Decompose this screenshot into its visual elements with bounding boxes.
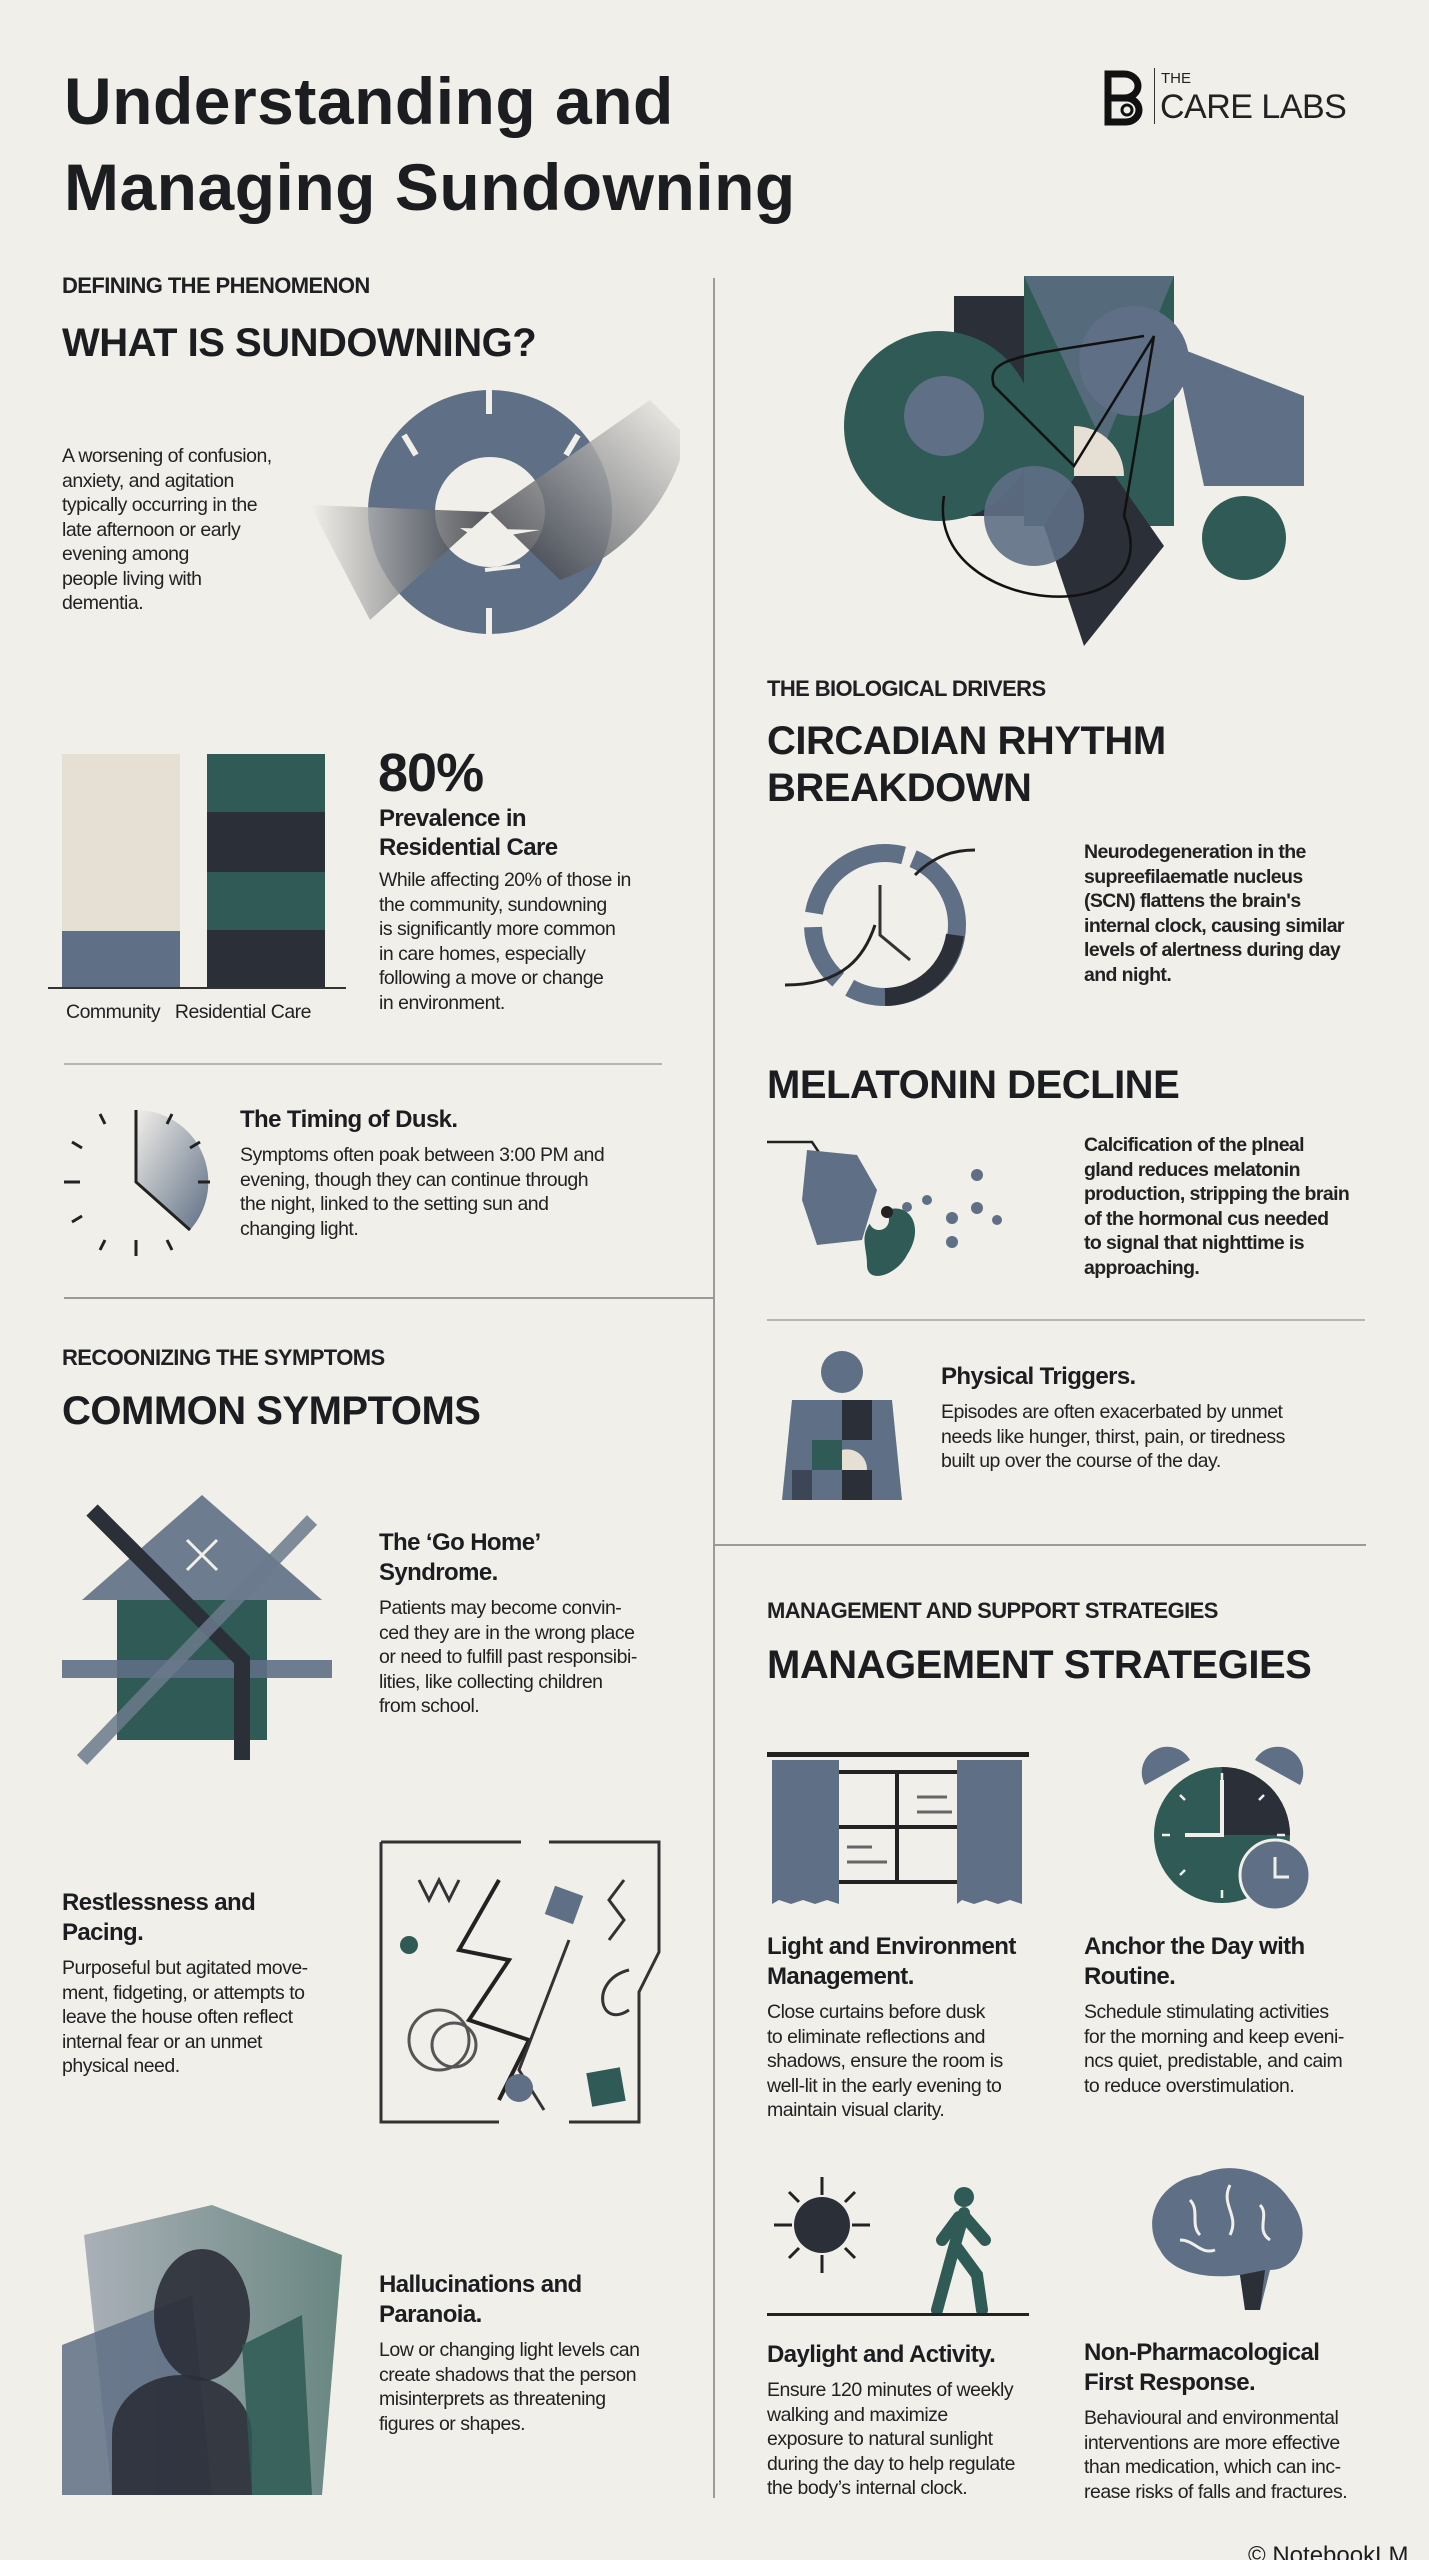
text: go home: or need to fulfill past responsibi- — [379, 1646, 637, 1668]
title: Managing Sundowning — [64, 150, 796, 224]
text: go home: Patients may become convin- — [379, 1597, 621, 1619]
text: daylight: during the day to help regulate — [767, 2452, 1015, 2474]
text: light and environment: shadows, ensure the room is — [767, 2050, 1003, 2072]
text: prevalence: in care homes, especially — [379, 942, 585, 964]
text: anchor the day: Schedule stimulating activities — [1084, 2001, 1329, 2023]
heading: what is sundowning: WHAT IS SUNDOWNING? — [62, 321, 536, 365]
text: non-pharmacological: First Response. — [1084, 2369, 1255, 2396]
text: go home: The ‘Go Home’ — [379, 1529, 541, 1556]
heading: common symptoms: COMMON SYMPTOMS — [62, 1389, 480, 1433]
text: restlessness: Pacing. — [62, 1919, 143, 1946]
text: light and environment — [767, 1933, 1016, 2121]
text: anchor the day: ncs quiet, predistable, and caim — [1084, 2050, 1342, 2072]
text: anchor the day: for the morning and keep eveni- — [1084, 2026, 1344, 2048]
text: go home — [379, 1529, 637, 1717]
text: timing of dusk: changing light. — [240, 1218, 358, 1240]
heading: melatonin: MELATONIN DECLINE — [767, 1063, 1179, 1107]
heading: circadian: CIRCADIAN RHYTHM — [767, 719, 1166, 763]
text: restlessness: leave the house often reflect — [62, 2006, 292, 2028]
logo — [1104, 68, 1346, 126]
text: light and environment: Light and Environment — [767, 1933, 1016, 1960]
text: physical triggers: needs like hunger, thirst, pain, or tiredness — [941, 1426, 1285, 1448]
title: Understanding and — [64, 64, 674, 138]
icon: hallucination shadows — [62, 2205, 342, 2495]
text: restlessness: Restlessness and — [62, 1889, 255, 1916]
text: melatonin: Calcification of the plneal — [1084, 1134, 1304, 1156]
text: circadian: (SCN) flattens the brain's — [1084, 890, 1301, 912]
text: circadian: and night. — [1084, 964, 1171, 986]
text: definition: typically occurring in the — [62, 494, 257, 516]
icon: curtains — [767, 1752, 1029, 1904]
text: go home: Syndrome. — [379, 1559, 498, 1586]
text: prevalence: While affecting 20% of those in — [379, 869, 631, 891]
dividers — [713, 278, 715, 2498]
text: hallucinations: figures or shapes. — [379, 2412, 525, 2434]
text: prevalence: Residential Care — [379, 834, 557, 861]
text: non-pharmacological: than medication, which can inc- — [1084, 2456, 1341, 2478]
text: light and environment: well-lit in the early evening to — [767, 2074, 1001, 2096]
text: anchor the day: Anchor the Day with — [1084, 1933, 1305, 1960]
text: daylight: Daylight and Activity. — [767, 2341, 995, 2368]
text: anchor the day: Routine. — [1084, 1963, 1175, 1990]
text: definition: people living with — [62, 568, 202, 590]
text: definition: A worsening of confusion, — [62, 445, 272, 467]
text: definition: evening among — [62, 543, 189, 565]
text: restlessness: internal fear or an unmet — [62, 2030, 262, 2052]
text: physical triggers — [941, 1363, 1285, 1472]
text: circadian: internal clock, causing similar — [1084, 914, 1344, 936]
icon: restless squiggles — [380, 1840, 660, 2124]
text: go home: ced they are in the wrong place — [379, 1622, 635, 1644]
text: prevalence: Prevalence in — [379, 805, 526, 832]
text: physical triggers: Physical Triggers. — [941, 1363, 1136, 1390]
text: hallucinations: misinterprets as threatening — [379, 2388, 606, 2410]
text: prevalence: in environment. — [379, 992, 505, 1014]
title — [64, 64, 796, 224]
text: hallucinations: Low or changing light levels can — [379, 2339, 639, 2361]
text: hallucinations: create shadows that the person — [379, 2364, 636, 2386]
heading: circadian: BREAKDOWN — [767, 766, 1031, 810]
text: daylight: exposure to natural sunlight — [767, 2428, 993, 2450]
text: definition: late afternoon or early — [62, 518, 240, 540]
text: restlessness: Purposeful but agitated move- — [62, 1957, 308, 1979]
text: melatonin: gland reduces melatonin — [1084, 1158, 1300, 1180]
bar chart: prevalence — [48, 754, 346, 1023]
section kicker: symptoms: RECOONIZING THE SYMPTOMS — [62, 1345, 385, 1370]
text: melatonin: approaching. — [1084, 1256, 1199, 1278]
text: definition: anxiety, and agitation — [62, 470, 234, 492]
text: circadian: supreefilaematle nucleus — [1084, 866, 1303, 888]
text: light and environment: maintain visual clarity. — [767, 2099, 944, 2121]
section kicker: management: MANAGEMENT AND SUPPORT STRATEGIES — [767, 1598, 1218, 1623]
section kicker: biological: THE BIOLOGICAL DRIVERS — [767, 676, 1046, 701]
text: light and environment: Close curtains before dusk — [767, 2001, 985, 2023]
text: non-pharmacological: Non-Pharmacological — [1084, 2339, 1319, 2366]
icon: go home house — [62, 1495, 332, 1765]
chart labels: Community Residential Care — [66, 1001, 311, 1023]
text: go home: lities, like collecting children — [379, 1670, 603, 1692]
icon: broken clock — [785, 844, 975, 1006]
text: timing of dusk: evening, though they can continue through — [240, 1168, 588, 1190]
icon: pineal gland — [767, 1140, 1002, 1276]
heading: management strategies: MANAGEMENT STRATEGIES — [767, 1643, 1311, 1687]
icon: alarm clock — [1142, 1746, 1308, 1908]
text: light and environment: to eliminate reflections and — [767, 2026, 985, 2048]
text: circadian: levels of alertness during day — [1084, 939, 1340, 961]
text: definition: dementia. — [62, 592, 143, 614]
text: non-pharmacological — [1084, 2339, 1347, 2502]
text: non-pharmacological: rease risks of falls and fractures. — [1084, 2480, 1347, 2502]
text: physical triggers: Episodes are often exacerbated by unmet — [941, 1401, 1282, 1423]
section kicker: defining: DEFINING THE PHENOMENON — [62, 273, 370, 298]
text: timing of dusk: The Timing of Dusk. — [240, 1106, 458, 1133]
text: circadian: Neurodegeneration in the — [1084, 841, 1306, 863]
text: daylight: Ensure 120 minutes of weekly — [767, 2379, 1013, 2401]
text: anchor the day — [1084, 1933, 1344, 2096]
text: hallucinations: Paranoia. — [379, 2301, 482, 2328]
text: restlessness: physical need. — [62, 2055, 180, 2077]
text: prevalence: is significantly more common — [379, 918, 615, 940]
icon: sunset clock — [319, 390, 680, 634]
text: prevalence: following a move or change — [379, 967, 603, 989]
text: prevalence: the community, sundowning — [379, 894, 607, 916]
icon: dusk clock — [64, 1110, 210, 1256]
text: melatonin: production, stripping the brain — [1084, 1183, 1349, 1205]
heading: circadian — [767, 719, 1166, 810]
text: non-pharmacological: Behavioural and environmental — [1084, 2407, 1338, 2429]
text: melatonin — [1084, 1134, 1349, 1278]
text: daylight: the body’s internal clock. — [767, 2477, 967, 2499]
text: restlessness: ment, fidgeting, or attempts to — [62, 1982, 304, 2004]
text: non-pharmacological: interventions are more effective — [1084, 2432, 1340, 2454]
text: anchor the day: to reduce overstimulation. — [1084, 2074, 1294, 2096]
text: definition — [62, 445, 272, 614]
text: restlessness — [62, 1889, 308, 2077]
icon: abstract brain — [844, 276, 1304, 646]
text: timing of dusk — [240, 1106, 604, 1240]
text: melatonin: to signal that nighttime is — [1084, 1232, 1304, 1254]
text: light and environment: Management. — [767, 1963, 914, 1990]
text: prevalence — [379, 805, 631, 1014]
text: daylight — [767, 2341, 1015, 2499]
text: circadian — [1084, 841, 1344, 986]
text: hallucinations — [379, 2271, 639, 2434]
text: timing of dusk: Symptoms often poak between 3:00 PM and — [240, 1144, 604, 1166]
text: melatonin: of the hormonal cus needed — [1084, 1208, 1328, 1230]
stat: 80%: 80% — [378, 743, 483, 803]
text: timing of dusk: the night, linked to the setting sun and — [240, 1193, 548, 1215]
icon: sun and walker — [767, 2177, 1029, 2316]
text: daylight: walking and maximize — [767, 2404, 948, 2426]
text: go home: from school. — [379, 1695, 479, 1717]
logo: CARE LABS — [1160, 88, 1346, 126]
icon: brain — [1152, 2168, 1303, 2310]
logo: THE — [1161, 70, 1191, 87]
text: physical triggers: built up over the course of the day. — [941, 1450, 1221, 1472]
text: hallucinations: Hallucinations and — [379, 2271, 582, 2298]
icon: person — [782, 1351, 902, 1500]
